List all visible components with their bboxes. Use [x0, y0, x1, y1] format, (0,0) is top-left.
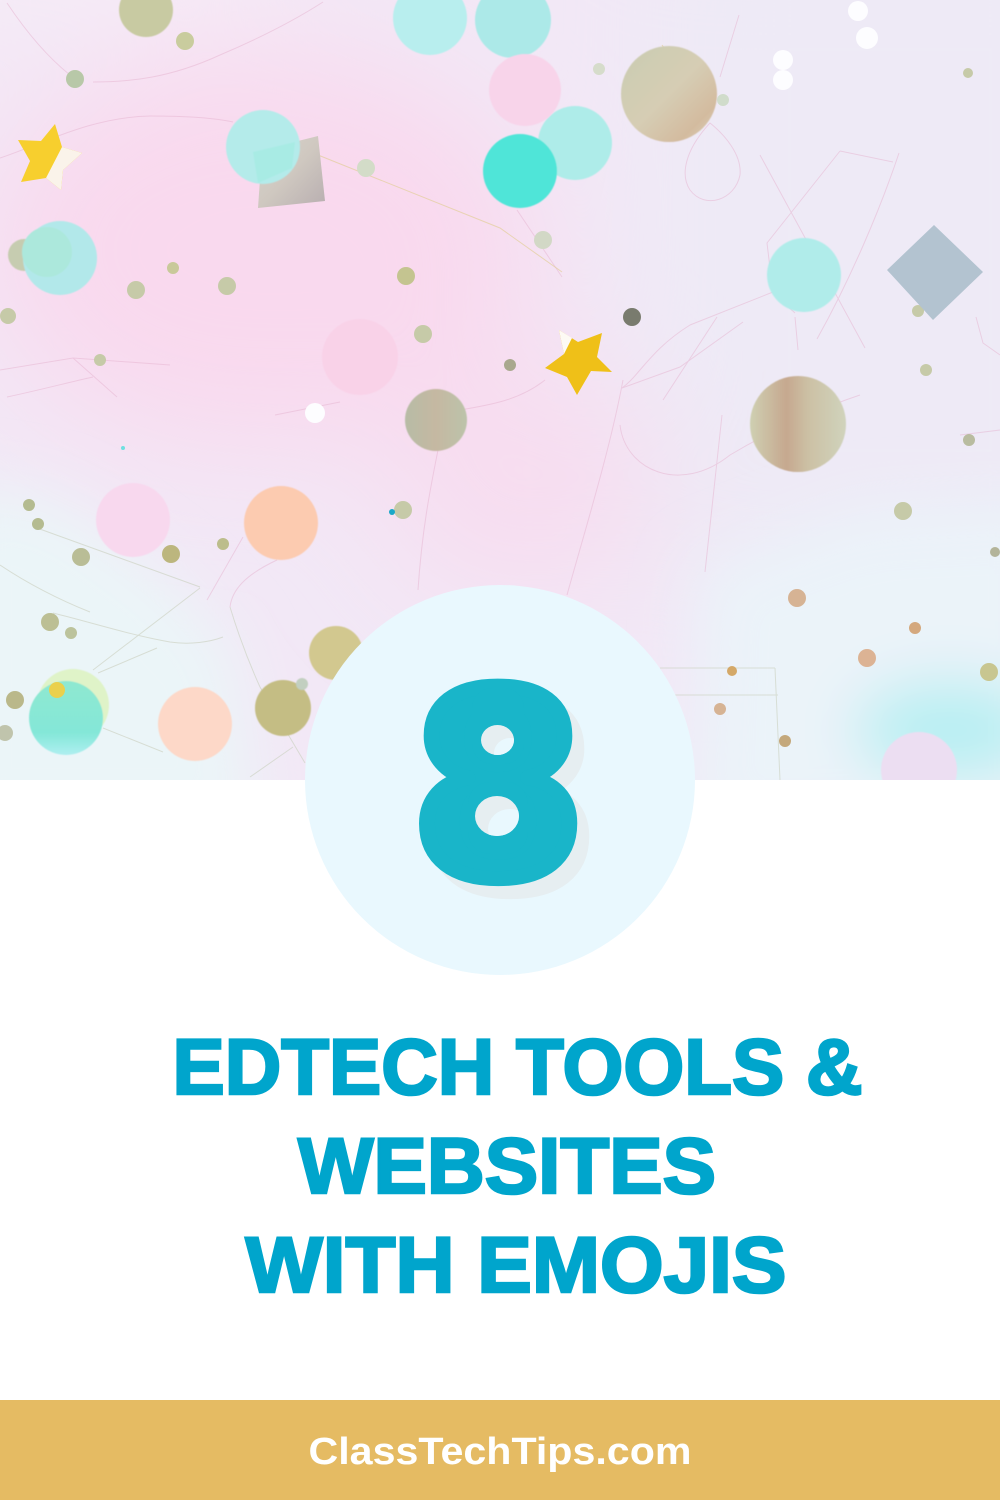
footer bar — [0, 1400, 1000, 1500]
confetti: white dots — [305, 1, 878, 423]
icon: gold star right — [545, 330, 612, 395]
icon: gold star left — [18, 124, 82, 190]
confetti: small dots — [0, 32, 1000, 747]
confetti: aqua paper circles — [8, 0, 841, 312]
footer website text: ClassTechTips.com — [308, 1431, 692, 1473]
title: EDTECH TOOLS & — [172, 1022, 862, 1111]
golden threads — [320, 44, 664, 272]
title — [172, 1022, 862, 1309]
title: WEBSITES — [298, 1121, 716, 1210]
thin threads — [0, 2, 1000, 607]
confetti: foil square behind aqua circle — [258, 136, 325, 208]
big number 8 — [419, 678, 589, 899]
big number 8: 8 — [430, 643, 590, 947]
confetti: metallic foil circles — [119, 0, 846, 736]
pale silver threads lower left — [0, 528, 780, 780]
big number 8: 8 — [418, 630, 578, 934]
number badge circle — [305, 585, 695, 975]
confetti: foil diamond — [887, 225, 983, 320]
photo background: pastel confetti — [0, 0, 1000, 840]
title: WITH EMOJIS — [246, 1220, 786, 1309]
confetti: pink and peach paper circles — [29, 54, 957, 808]
